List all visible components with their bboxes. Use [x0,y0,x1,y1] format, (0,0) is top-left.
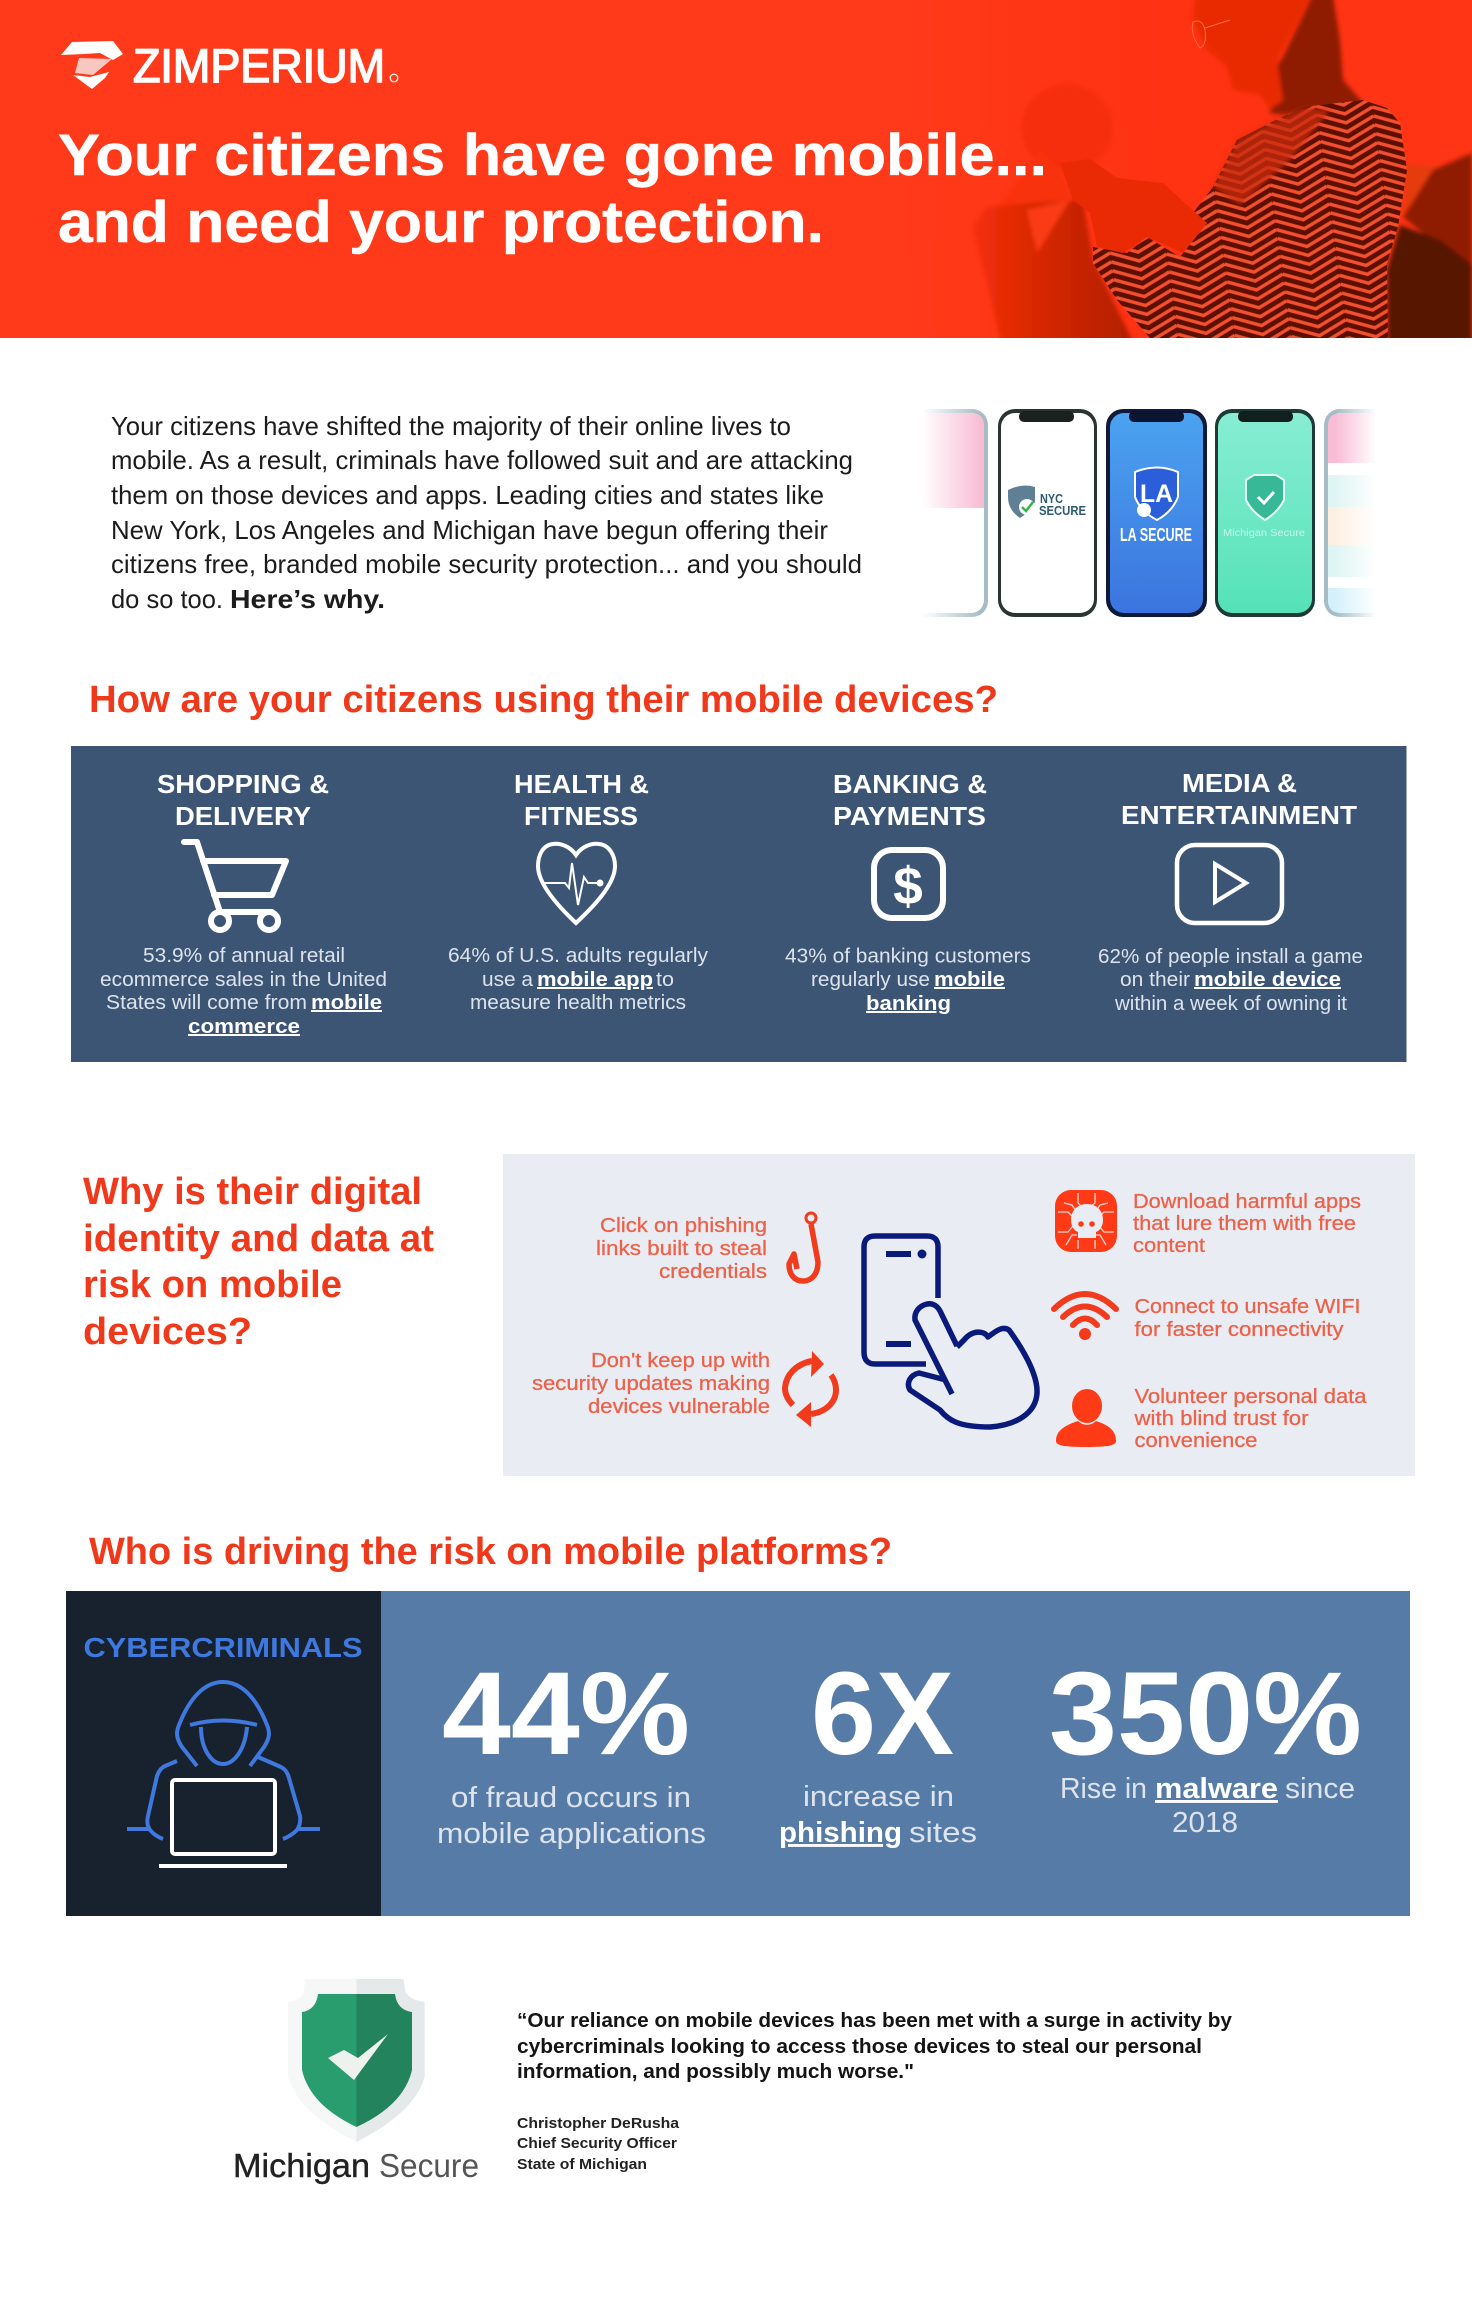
column: health and fitness: measure health metrics [470,992,686,1014]
quote [517,2009,1233,2083]
icon: heart with pulse [538,844,615,923]
logo: Michigan Secure shield [233,1979,479,2184]
stat: 6X: sites [909,1817,977,1849]
heading: why data at risk: risk on mobile [83,1264,342,1306]
title [58,123,1047,255]
stat: 44 percent [437,1648,706,1850]
intro text: do so too. [111,584,223,614]
stat: 350 percent: 350% [1049,1648,1362,1780]
intro text: citizens free, branded mobile security protection... and you should [111,549,862,579]
text: volunteer personal data: convenience [1134,1430,1258,1452]
column: media and entertainment [1098,768,1363,1015]
column: health and fitness [448,769,708,1014]
column: health and fitness: FITNESS [524,801,638,831]
phone: NYC Secure [998,409,1097,617]
icon: phone and tapping hand [864,1236,1037,1427]
text: volunteer personal data [1133,1386,1367,1452]
stat: 350 percent [1049,1648,1362,1839]
stat: 44 percent: 44% [442,1648,690,1780]
stat: 44 percent: mobile applications [437,1818,706,1850]
column: shopping and delivery: ecommerce sales in the United [100,969,387,991]
stat: 44 percent: of fraud occurs in [451,1782,691,1814]
quote attribution: State of Michigan [517,2156,647,2173]
text: download harmful apps: Download harmful apps [1133,1191,1361,1213]
panel: cybercriminals [66,1591,381,1916]
column: banking and payments: regularly use [811,969,930,991]
column: banking and payments [785,769,1031,1015]
column: banking and payments: 43% of banking customers [785,946,1031,968]
quote attribution: Chief Security Officer [517,2135,677,2152]
panel: risky behaviours [503,1154,1415,1476]
phone: partial left [890,400,988,625]
intro text: Here’s why. [230,584,385,614]
phone: LA Secure [1106,409,1207,617]
column: health and fitness: use a [482,969,534,991]
column: shopping and delivery: mobile [311,992,382,1014]
column: shopping and delivery: DELIVERY [175,801,311,831]
title: Your citizens have gone mobile... [58,123,1047,188]
title: and need your protection. [58,190,824,255]
text: click on phishing links [596,1215,767,1283]
stat: 6X: phishing [779,1817,902,1849]
phone: LA Secure: LA [1140,480,1173,508]
column: banking and payments: banking [866,993,951,1015]
logo: Zimperium: ZIMPERIUM [133,39,385,92]
icon: fish hook [789,1213,818,1281]
column: media and entertainment: ENTERTAINMENT [1121,800,1357,830]
column: media and entertainment: on their [1120,969,1190,991]
icon: shopping cart [184,842,286,930]
text: security updates: Don't keep up with [591,1350,770,1372]
stat: 350 percent: since [1285,1773,1355,1805]
stat: 6X: 6X [811,1648,954,1780]
text: click on phishing links: Click on phishing [600,1215,767,1237]
text: download harmful apps: that lure them with free [1133,1213,1356,1235]
icon: refresh arrows [785,1351,836,1427]
column: media and entertainment: within a week of owning it [1114,993,1347,1015]
heading: why data at risk: identity and data at [83,1218,434,1260]
heading: why data at risk: Why is their digital [83,1171,422,1213]
icon: person [1056,1389,1116,1447]
intro text: Your citizens have shifted the majority of their online lives to [111,411,791,441]
intro text: them on those devices and apps. Leading cities and states like [111,480,824,510]
intro text [111,411,862,614]
column: health and fitness: 64% of U.S. adults regularly [448,945,708,967]
text: unsafe wifi: Connect to unsafe WIFI [1134,1296,1360,1318]
heading: how citizens use devices: How are your citizens using their mobile devices? [89,679,998,721]
panel: mobile device usage [71,746,1406,1062]
phone: partial right [1324,400,1410,625]
column: health and fitness: to [656,969,674,991]
text: unsafe wifi: for faster connectivity [1134,1319,1344,1341]
panel: risk statistics [381,1591,1410,1916]
intro text: New York, Los Angeles and Michigan have begun offering their [111,515,828,545]
quote attribution [517,2115,680,2173]
phone: NYC Secure: NYC [1040,491,1064,506]
stat: 6X [779,1648,977,1849]
panel: cybercriminals: CYBERCRIMINALS [84,1632,362,1663]
text: security updates: security updates making [532,1373,770,1395]
column: health and fitness: HEALTH & [514,769,649,799]
icon: wifi [1054,1294,1116,1340]
column: banking and payments: mobile [934,969,1005,991]
stat: 350 percent: 2018 [1172,1807,1238,1839]
phones showing branded security apps [890,400,1410,625]
logo: Michigan Secure shield: Michigan [233,2147,370,2184]
quote: information, and possibly much worse." [517,2060,914,2083]
stat: 6X: increase in [803,1781,954,1813]
icon: hooded hacker at laptop [127,1682,320,1866]
column: banking and payments: PAYMENTS [833,801,986,831]
icon: dollar sign [874,850,943,918]
column: shopping and delivery: SHOPPING & [157,769,329,799]
text: security updates: devices vulnerable [588,1396,770,1418]
intro text: mobile. As a result, criminals have followed suit and are attacking [111,445,853,475]
text: volunteer personal data: with blind trust for [1133,1408,1309,1430]
logo: Michigan Secure shield: Secure [379,2147,479,2184]
column: shopping and delivery: States will come from [106,992,307,1014]
quote: “Our reliance on mobile devices has been met with a surge in activity by [517,2009,1233,2032]
stat: 350 percent: malware [1155,1773,1278,1805]
text: security updates [532,1350,770,1418]
phone: NYC Secure: SECURE [1039,503,1086,518]
heading: why data at risk [83,1171,434,1353]
phone: Michigan Secure: Michigan Secure [1223,528,1305,539]
heading: who drives the risk: Who is driving the risk on mobile platforms? [89,1531,892,1573]
text: unsafe wifi [1134,1296,1360,1341]
icon: play button [1177,845,1282,923]
icon: malicious app skull [1055,1190,1117,1252]
phone: LA Secure: LA SECURE [1120,525,1192,545]
column: shopping and delivery: 53.9% of annual retail [143,945,345,967]
phone: Michigan Secure [1215,409,1315,617]
column: shopping and delivery: commerce [188,1016,300,1038]
column: banking and payments: BANKING & [833,769,987,799]
icon: dollar sign: $ [893,857,923,916]
heading: why data at risk: devices? [83,1311,252,1353]
column: health and fitness: mobile app [537,969,653,991]
text: download harmful apps [1133,1191,1361,1257]
text: volunteer personal data: Volunteer personal data [1134,1386,1367,1408]
quote: cybercriminals looking to access those devices to steal our personal [517,2035,1202,2058]
text: click on phishing links: links built to steal [596,1238,767,1260]
header banner [0,0,1472,350]
text: click on phishing links: credentials [659,1261,767,1283]
column: media and entertainment: mobile device [1194,969,1341,991]
column: media and entertainment: MEDIA & [1182,768,1297,798]
column: media and entertainment: 62% of people install a game [1098,946,1363,968]
text: download harmful apps: content [1133,1235,1205,1257]
photo: woman using a phone [973,0,1472,350]
quote attribution: Christopher DeRusha [517,2115,680,2132]
stat: 350 percent: Rise in [1060,1773,1147,1805]
column: shopping and delivery [100,769,387,1038]
